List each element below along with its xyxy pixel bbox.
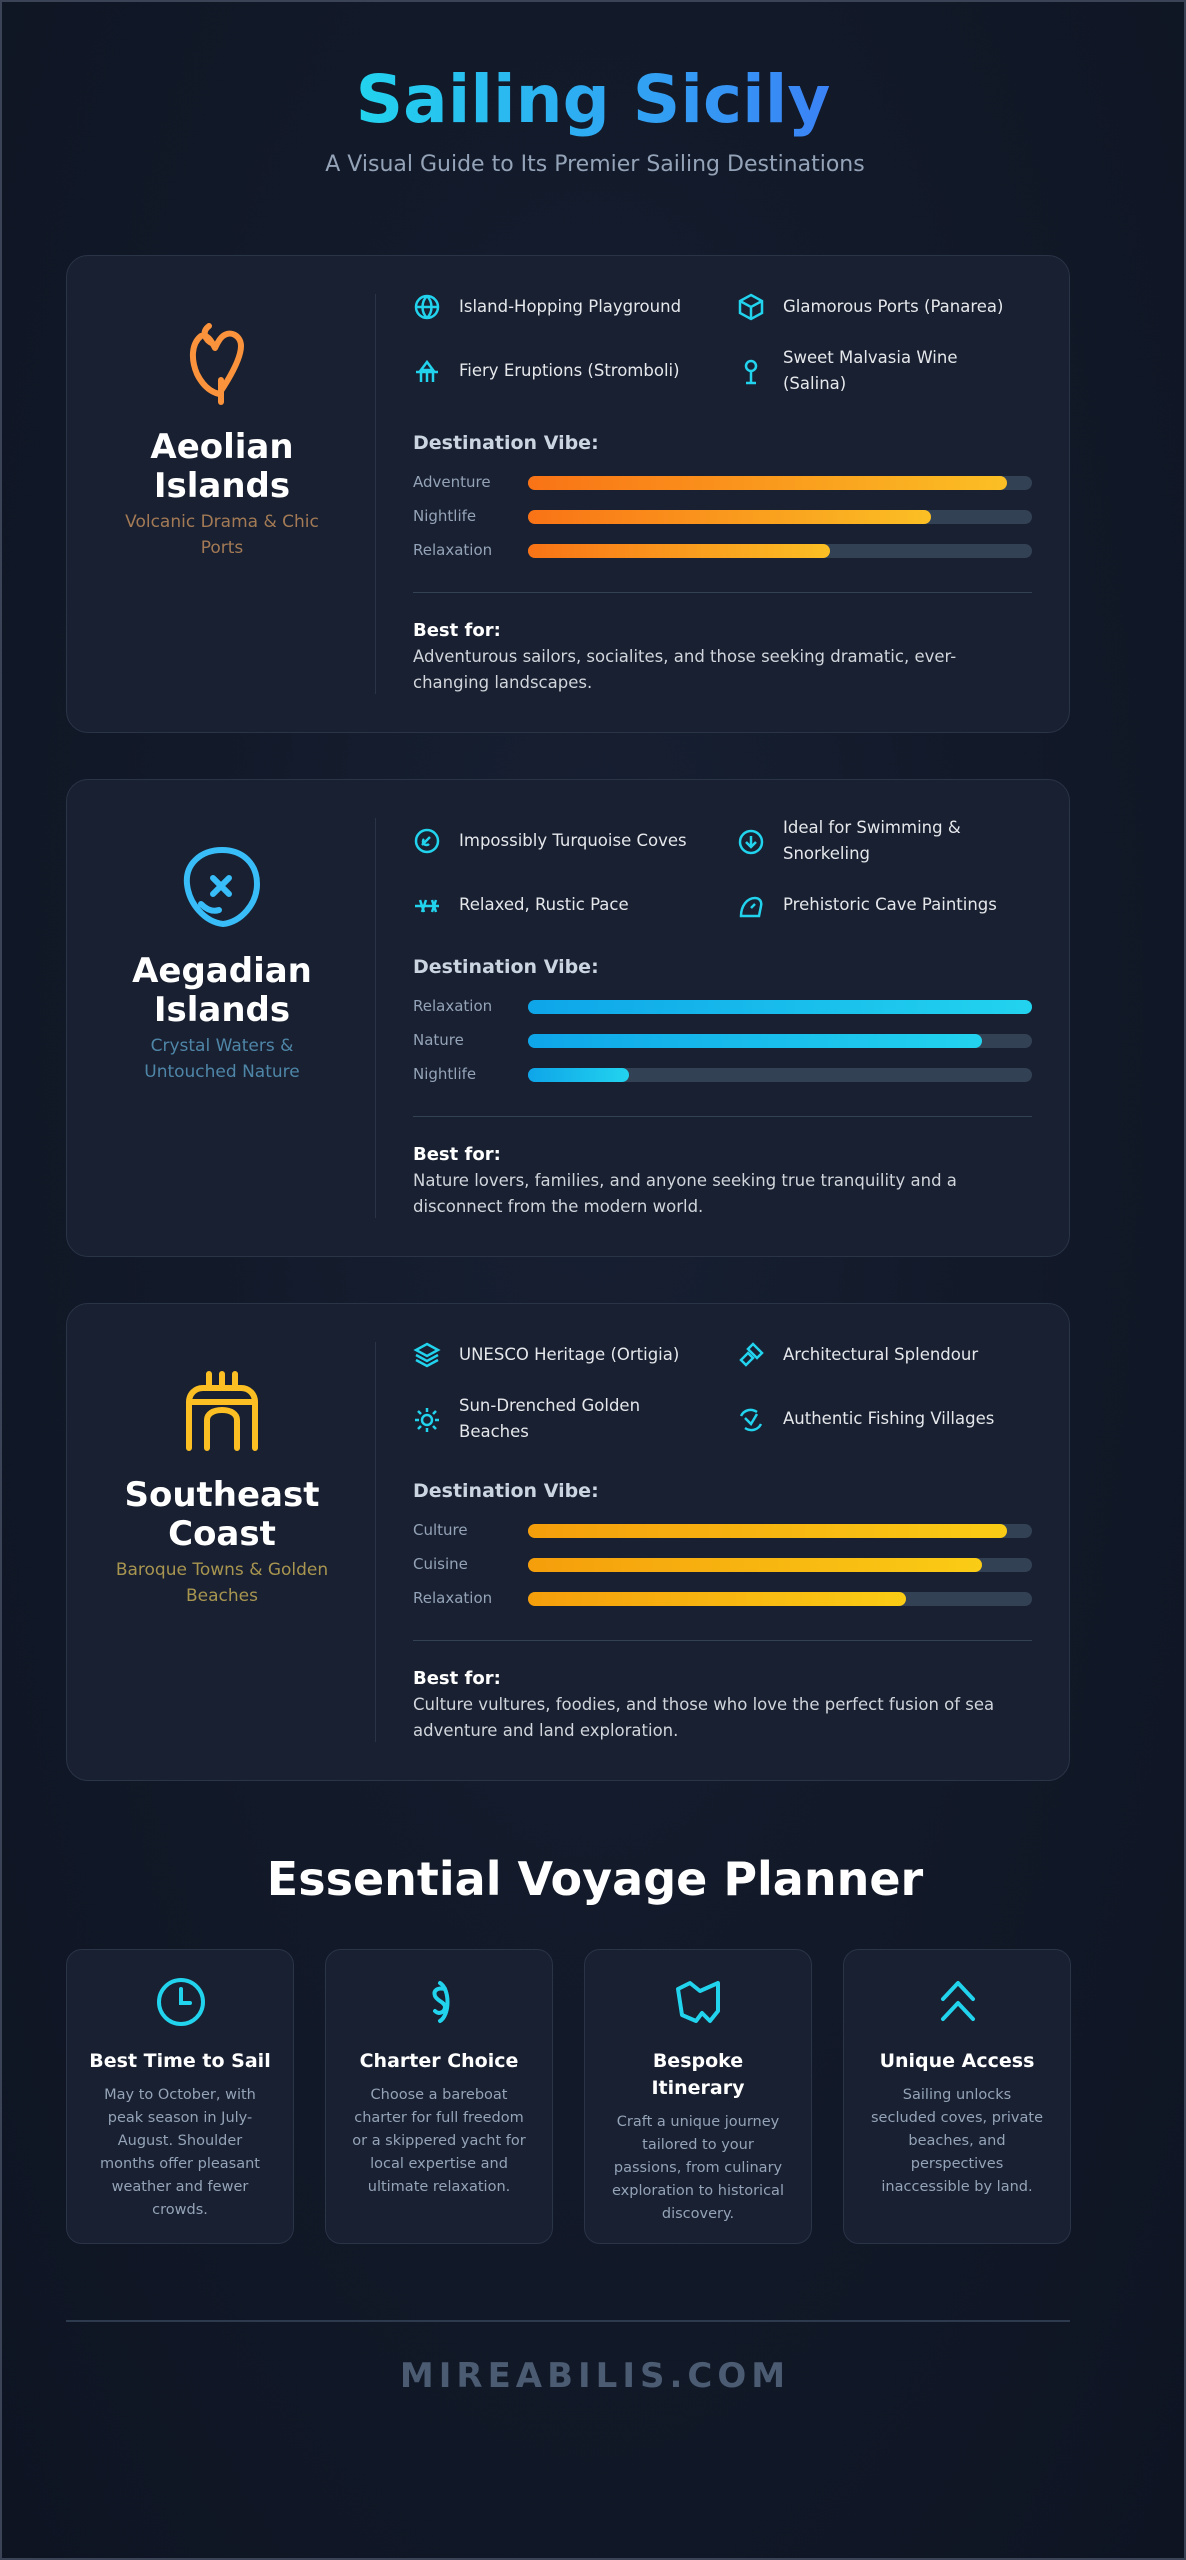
feature: architecture: Architectural Splendour: [783, 1345, 978, 1364]
feature: island hopping: Island-Hopping Playground: [459, 297, 681, 316]
icon: baroque building: [186, 1371, 258, 1451]
text: best for: Culture vultures, foodies, and those who love the perfect fusion of sea adventure and land exploration.: [413, 1695, 994, 1740]
feature: island hopping: [414, 294, 681, 320]
bar chart: vibe: Destination Vibe:: [413, 1480, 599, 1502]
text: best for: Best for:: [413, 620, 501, 641]
text: best for: [413, 1144, 957, 1216]
feature: rustic pace: Relaxed, Rustic Pace: [459, 895, 629, 914]
bar chart: vibe: [413, 432, 1032, 559]
panel: Southeast Coast: [66, 1303, 1070, 1781]
heading: Southeast: [124, 1475, 320, 1515]
text: best for: Adventurous sailors, socialites, and those seeking dramatic, ever-changing landscapes.: [413, 647, 956, 692]
icon: volcano heart: [190, 323, 244, 405]
feature: eruptions: Fiery Eruptions (Stromboli): [459, 361, 680, 380]
bar chart: vibe: Adventure: [413, 473, 491, 491]
bar chart: vibe: Relaxation: [413, 997, 492, 1015]
card: access: Unique Access: [880, 2050, 1034, 2072]
heading: [124, 1475, 320, 1554]
heading: Coast: [168, 1514, 276, 1554]
text: best for: Best for:: [413, 1144, 501, 1165]
bar chart: vibe: Nature: [413, 1031, 464, 1049]
bar chart: vibe: Nightlife: [413, 1065, 476, 1083]
icon: chevrons up: [940, 1980, 976, 2022]
tagline: Crystal Waters & Untouched Nature: [144, 1036, 300, 1082]
card: itinerary: [584, 1949, 812, 2244]
tagline: Baroque Towns & Golden Beaches: [116, 1560, 328, 1606]
bar chart: vibe: Relaxation: [413, 541, 492, 559]
bar chart: vibe: Destination Vibe:: [413, 956, 599, 978]
panel: Aeolian Islands: [66, 255, 1070, 733]
heading: Islands: [154, 990, 290, 1030]
card: access: Sailing unlocks: [903, 2087, 1011, 2103]
icon: dollar: [432, 1980, 450, 2024]
card: best time: May to October, with peak season in July-August. Shoulder months offer pleasant weather and fewer crowds.: [100, 2087, 260, 2218]
feature: fishing villages: Authentic Fishing Villages: [783, 1409, 994, 1428]
card: access: [843, 1949, 1071, 2244]
icon: island x: [184, 847, 260, 927]
feature: swimming: Ideal for Swimming & Snorkeling: [783, 818, 961, 863]
feature: cave paintings: Prehistoric Cave Paintings: [783, 895, 997, 914]
feature: coves: Impossibly Turquoise Coves: [459, 831, 687, 850]
heading: Aegadian: [132, 951, 312, 991]
card: itinerary: Itinerary: [651, 2077, 745, 2099]
icon: map: [676, 1980, 720, 2024]
text: best for: [413, 620, 956, 692]
text: best for: Best for:: [413, 1668, 501, 1689]
feature: glamorous ports: [738, 294, 1003, 320]
bar chart: vibe: [413, 1480, 1032, 1607]
heading: Islands: [154, 466, 290, 506]
card: charter: Choose a bareboat charter for full freedom or a skippered yacht for local expertise and ultimate relaxation.: [352, 2087, 526, 2195]
card: charter: Charter Choice: [360, 2050, 518, 2072]
icon: clock: [157, 1978, 205, 2026]
card: access: secluded coves, private beaches, and perspectives inaccessible by land.: [871, 2110, 1043, 2195]
feature: coves: [414, 828, 687, 854]
card: itinerary: Bespoke: [653, 2050, 743, 2072]
title: Sailing Sicily: [356, 61, 830, 138]
feature: wine: Sweet Malvasia Wine (Salina): [783, 348, 957, 393]
heading: Aeolian: [150, 427, 294, 467]
subtitle: A Visual Guide to Its Premier Sailing Destinations: [325, 152, 865, 177]
heading: [132, 951, 312, 1030]
bar chart: vibe: [413, 956, 1032, 1083]
text: best for: Nature lovers, families, and anyone seeking true tranquility and a disconnect from the modern world.: [413, 1171, 957, 1216]
card: charter: [325, 1949, 553, 2244]
heading: [150, 427, 294, 506]
heading: planner: Essential Voyage Planner: [267, 1852, 923, 1906]
feature: fishing villages: [740, 1408, 994, 1432]
bar chart: vibe: Cuisine: [413, 1555, 468, 1573]
feature: architecture: [739, 1342, 978, 1367]
feature: UNESCO: UNESCO Heritage (Ortigia): [459, 1345, 679, 1364]
bar chart: vibe: Destination Vibe:: [413, 432, 599, 454]
footer: MIREABILIS.COM: [400, 2356, 790, 2396]
card: itinerary: Craft a unique journey tailored to your passions, from culinary exploration to historical discovery.: [612, 2114, 784, 2222]
bar chart: vibe: Nightlife: [413, 507, 476, 525]
feature: glamorous ports: Glamorous Ports (Panarea): [783, 297, 1003, 316]
panel: Aegadian Islands: [66, 779, 1070, 1257]
bar chart: vibe: Relaxation: [413, 1589, 492, 1607]
feature: beaches: Sun-Drenched Golden Beaches: [459, 1396, 640, 1441]
text: best for: [413, 1668, 994, 1740]
tagline: Volcanic Drama & Chic Ports: [125, 512, 319, 558]
bar chart: vibe: Culture: [413, 1521, 468, 1539]
card: best time: Best Time to Sail: [89, 2050, 271, 2072]
feature: UNESCO: [414, 1342, 679, 1368]
card: best time: [66, 1949, 294, 2244]
